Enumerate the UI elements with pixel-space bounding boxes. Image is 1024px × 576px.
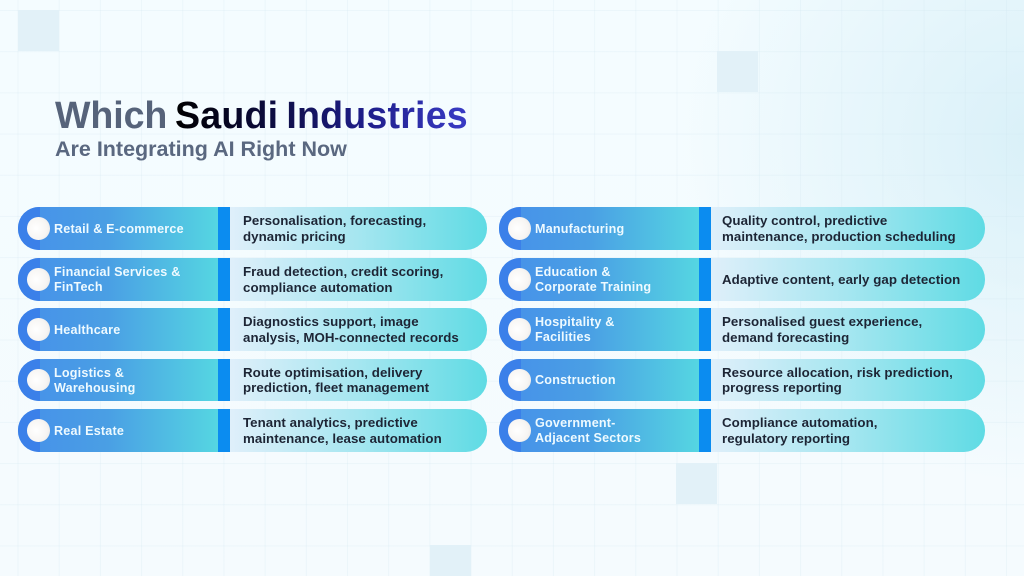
row: Financial Services & FinTech: FinTech [54,280,103,294]
row: Manufacturing: Manufacturing [535,222,624,236]
row: Hospitality & Facilities: Facilities [535,330,591,344]
row: Healthcare: Healthcare [54,323,120,337]
title: Which Saudi Industries [55,94,468,136]
row: Construction: Construction [535,373,616,387]
row: Construction [499,359,985,401]
row: Retail & E-commerce: Personalisation, forecasting, [243,213,426,228]
row: Financial Services & FinTech: Fraud detection, credit scoring, [243,264,443,279]
row: Hospitality & Facilities [499,308,985,351]
row: Real Estate [18,409,487,452]
row: Healthcare: Diagnostics support, image [243,314,419,329]
row: Government-Adjacent Sectors: regulatory reporting [722,430,850,446]
row: Real Estate: Tenant analytics, predictive [243,415,418,430]
row: Logistics & Warehousing: prediction, fleet management [243,380,429,395]
row: Real Estate: maintenance, lease automation [243,430,442,446]
row: Hospitality & Facilities: Hospitality & [535,315,615,329]
row: Government-Adjacent Sectors: Compliance automation, [722,415,878,430]
row: Logistics & Warehousing [18,359,487,401]
row: Logistics & Warehousing: Route optimisation, delivery [243,364,422,380]
row: Logistics & Warehousing: Logistics & [54,366,124,380]
row: Financial Services & FinTech: Financial Services & [54,265,180,279]
row: Construction: progress reporting [722,380,842,395]
row: Manufacturing [499,207,985,250]
row: Healthcare: analysis, MOH-connected records [243,330,459,344]
subtitle: Are Integrating AI Right Now [55,137,347,161]
row: Education & Corporate Training [499,258,985,301]
row: Hospitality & Facilities: Personalised guest experience, [722,314,922,329]
row: Government-Adjacent Sectors [499,409,985,452]
row: Financial Services & FinTech: compliance automation [243,280,393,294]
row: Retail & E-commerce: dynamic pricing [243,228,346,244]
row: Retail & E-commerce [18,207,487,250]
row: Healthcare [18,308,487,351]
row: Education & Corporate Training: Adaptive content, early gap detection [722,272,960,287]
row: Retail & E-commerce: Retail & E-commerce [54,222,184,236]
row: Real Estate: Real Estate [54,424,124,438]
row: Logistics & Warehousing: Warehousing [54,381,136,395]
row: Hospitality & Facilities: demand forecasting [722,330,849,344]
row: Manufacturing: maintenance, production scheduling [722,228,956,244]
row: Financial Services & FinTech [18,258,487,301]
row: Government-Adjacent Sectors: Adjacent Sectors [535,431,641,445]
row: Education & Corporate Training: Corporate Training [535,280,651,294]
row: Education & Corporate Training: Education & [535,265,611,279]
row: Construction: Resource allocation, risk prediction, [722,364,953,380]
row: Manufacturing: Quality control, predictive [722,213,887,228]
row: Government-Adjacent Sectors: Government- [535,416,616,430]
